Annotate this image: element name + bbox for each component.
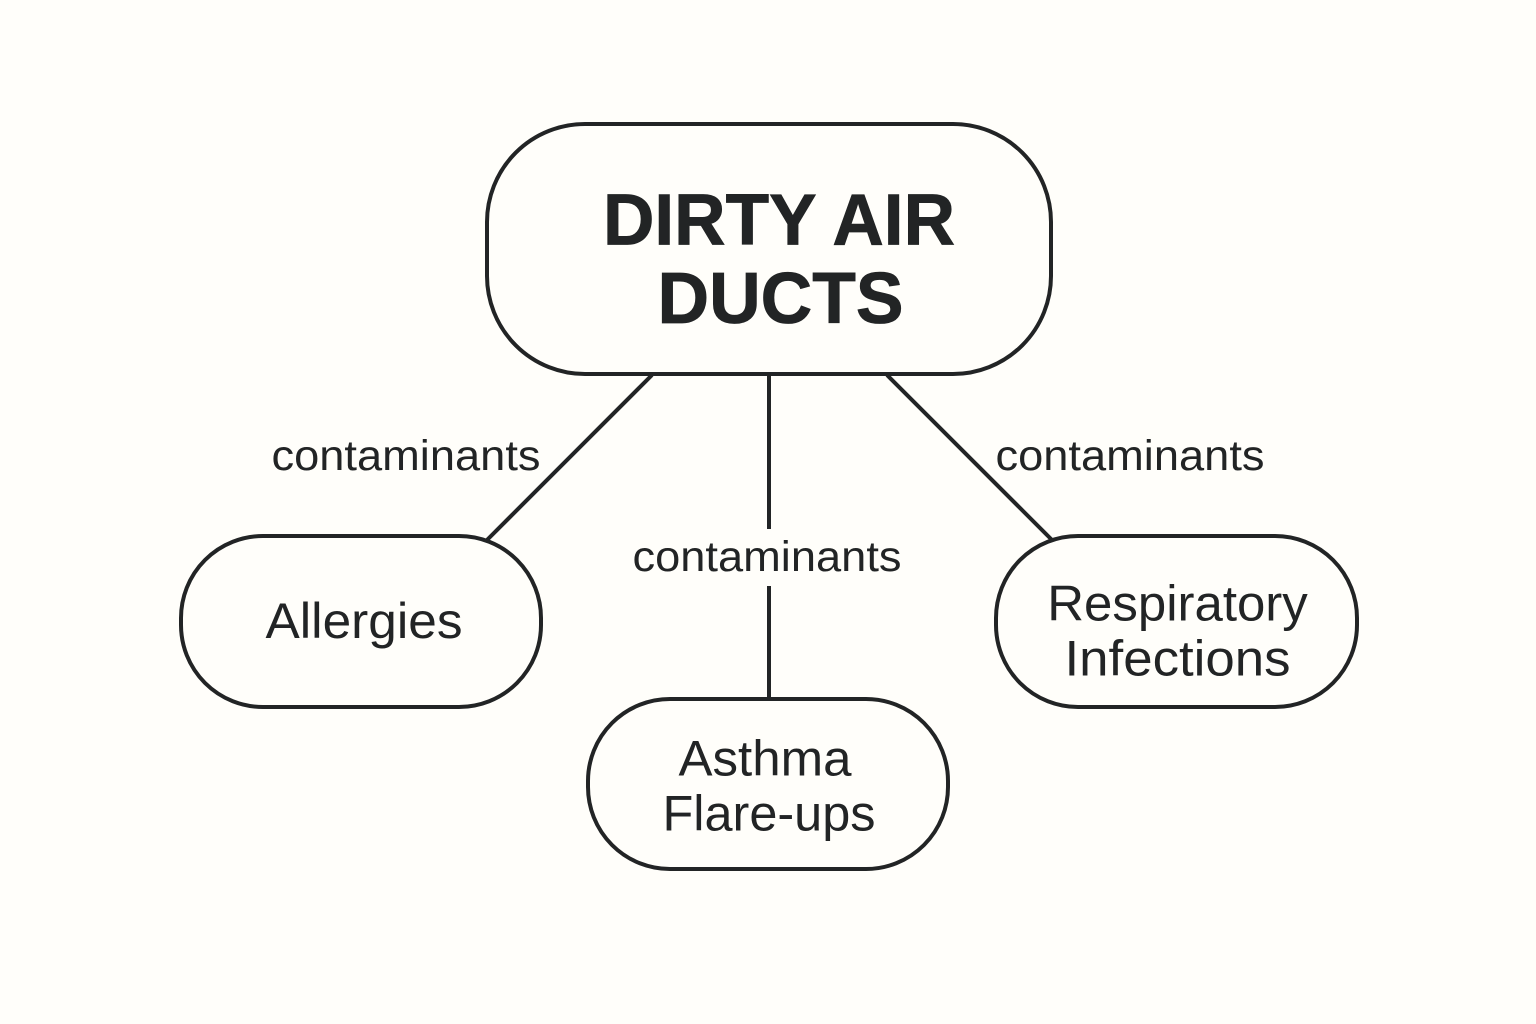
node label: asthma flare-ups: Asthma (678, 730, 852, 786)
edge label: center contaminants: contaminants (632, 534, 902, 581)
node: allergies (181, 536, 541, 707)
connector: ducts to asthma flare-ups, lower segment (767, 586, 771, 699)
connector: ducts to asthma flare-ups, upper segment (767, 375, 771, 529)
node label: allergies: Allergies (266, 593, 462, 649)
node label: asthma flare-ups: Flare-ups (662, 786, 876, 842)
node label: respiratory infections (1047, 576, 1308, 686)
node: respiratory infections (996, 536, 1357, 707)
node: asthma flare-ups (588, 699, 948, 869)
node label: respiratory infections: Infections (1064, 630, 1290, 686)
heading (603, 180, 955, 339)
edge label: right contaminants: contaminants (996, 433, 1264, 480)
main node: dirty air ducts (487, 124, 1051, 374)
node label: respiratory infections: Respiratory (1047, 576, 1308, 632)
heading: DUCTS (658, 259, 904, 339)
connector: ducts to respiratory infections (887, 375, 1053, 541)
heading: DIRTY AIR (603, 180, 955, 260)
connector: ducts to allergies (486, 375, 652, 541)
edge label: left contaminants: contaminants (272, 433, 540, 480)
node label: asthma flare-ups (662, 730, 876, 842)
